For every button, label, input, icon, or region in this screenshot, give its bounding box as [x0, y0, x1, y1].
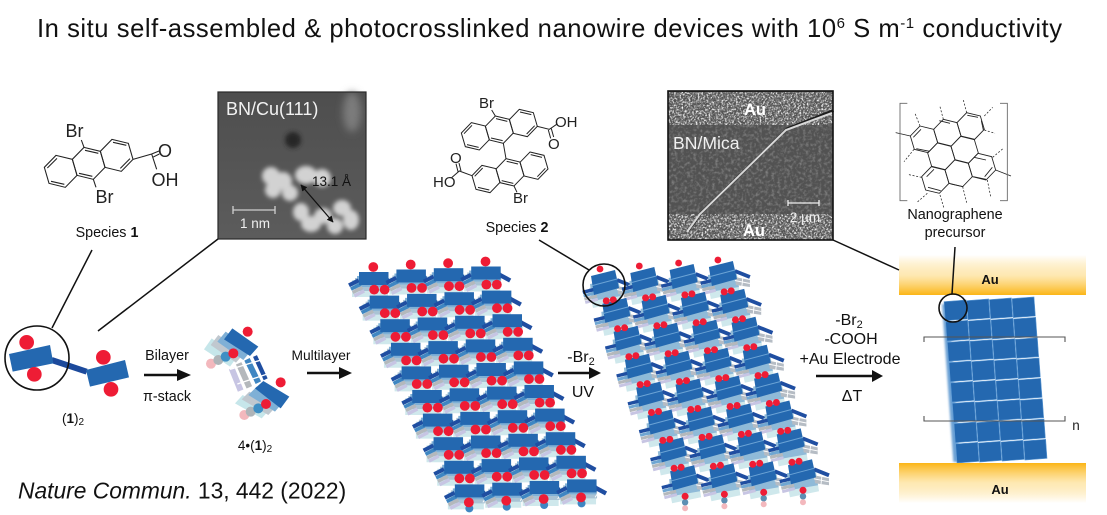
molecule: species 2: HO	[433, 174, 456, 191]
dimer (1)2	[5, 326, 129, 397]
title: S m	[845, 15, 900, 43]
scale bar: 1 nm: 1 nm	[240, 216, 270, 231]
molecule: species 2: O	[548, 136, 560, 153]
label: 4•(1)2: 4•(1)	[238, 438, 267, 453]
distance arrow: 13.1 Å: 13.1 Å	[312, 174, 351, 189]
molecule: species 1	[44, 121, 179, 207]
repeat bracket n: n	[1072, 418, 1080, 433]
arrow: -Br2 UV: 2	[589, 356, 595, 368]
citation: Nature Commun. 13, 442 (2022)	[18, 478, 346, 504]
distance arrow: 13.1 Å	[301, 174, 351, 222]
molecule: species 2: Br	[513, 190, 528, 207]
label: (1)2: 2	[78, 417, 84, 428]
molecule: species 2	[433, 95, 578, 207]
nanowire	[942, 297, 1047, 463]
title: -1	[900, 15, 914, 32]
electrode: top Au: Au	[981, 272, 999, 287]
molecule: nanographene precursor	[896, 100, 1011, 208]
circle callout on monomer	[5, 326, 69, 390]
arrow: -Br2 -COOH +Au Electrode ΔT: ΔT	[842, 388, 862, 405]
electrode: bottom Au: Au	[991, 482, 1009, 497]
circle callout on lattice	[583, 264, 625, 306]
label: nanographene precursor: Nanographene	[907, 207, 1003, 223]
title: In situ self-assembled & photocrosslinked nanowire devices with 10	[37, 15, 836, 43]
arrow: -Br2 -COOH +Au Electrode ΔT	[800, 312, 901, 405]
arrow: -Br2 -COOH +Au Electrode ΔT: 2	[857, 319, 863, 331]
electrode: top Au	[899, 255, 1086, 295]
molecule: species 1: OH	[152, 170, 178, 190]
label: species 1: Species 1	[76, 225, 138, 241]
arrow: bilayer π-stack: Bilayer	[145, 348, 189, 364]
arrow: -Br2 -COOH +Au Electrode ΔT: -Br	[835, 312, 857, 329]
label: species 2: Species 2	[486, 220, 548, 236]
molecule: species 1: Br	[66, 121, 84, 141]
label: Au top: Au	[744, 101, 766, 119]
circle callout on nanowire	[939, 294, 967, 322]
bilayer stack 4•(1)2	[204, 327, 289, 420]
molecule: species 1: Br	[96, 187, 114, 207]
scale bar: 1 nm	[233, 206, 275, 231]
molecule: species 2: Br	[479, 95, 494, 112]
label: BN/Mica: BN/Mica	[673, 133, 740, 153]
label: 4•(1)2: 2	[267, 444, 273, 455]
arrow: bilayer π-stack: π-stack	[143, 389, 192, 405]
arrow: -Br2 UV: UV	[572, 384, 594, 401]
label: (1)2: (1)	[62, 411, 78, 426]
arrow: multilayer	[291, 348, 352, 379]
scale bar: 2 µm: 2 µm	[790, 210, 820, 225]
electrode: bottom Au	[899, 463, 1086, 503]
arrow: -Br2 -COOH +Au Electrode ΔT: +Au Electrode	[800, 351, 901, 368]
label: Au bottom: Au	[743, 222, 765, 240]
multilayer lattice	[348, 257, 606, 512]
STM image: BN/Cu(111)	[218, 92, 366, 239]
repeat bracket n	[924, 337, 1080, 433]
title: 6	[837, 15, 845, 32]
leader lines from structures to schematic	[52, 239, 955, 331]
arrow: multilayer: Multilayer	[291, 348, 351, 363]
arrow: bilayer π-stack	[143, 348, 192, 405]
photocrosslinked lattice	[582, 257, 829, 511]
scale bar: 2 µm	[788, 200, 820, 225]
title: conductivity	[915, 15, 1062, 43]
molecule: species 2: OH	[555, 114, 578, 131]
SEM image: BN/Mica	[668, 91, 834, 240]
molecule: species 2: O	[450, 150, 462, 167]
arrow: -Br2 UV: -Br	[567, 349, 589, 366]
arrow: -Br2 -COOH +Au Electrode ΔT: -COOH	[824, 331, 878, 348]
label: nanographene precursor: precursor	[925, 225, 986, 241]
label: BN/Cu(111): BN/Cu(111)	[226, 99, 318, 119]
arrow: -Br2 UV	[558, 349, 601, 401]
molecule: species 1: O	[158, 141, 172, 161]
